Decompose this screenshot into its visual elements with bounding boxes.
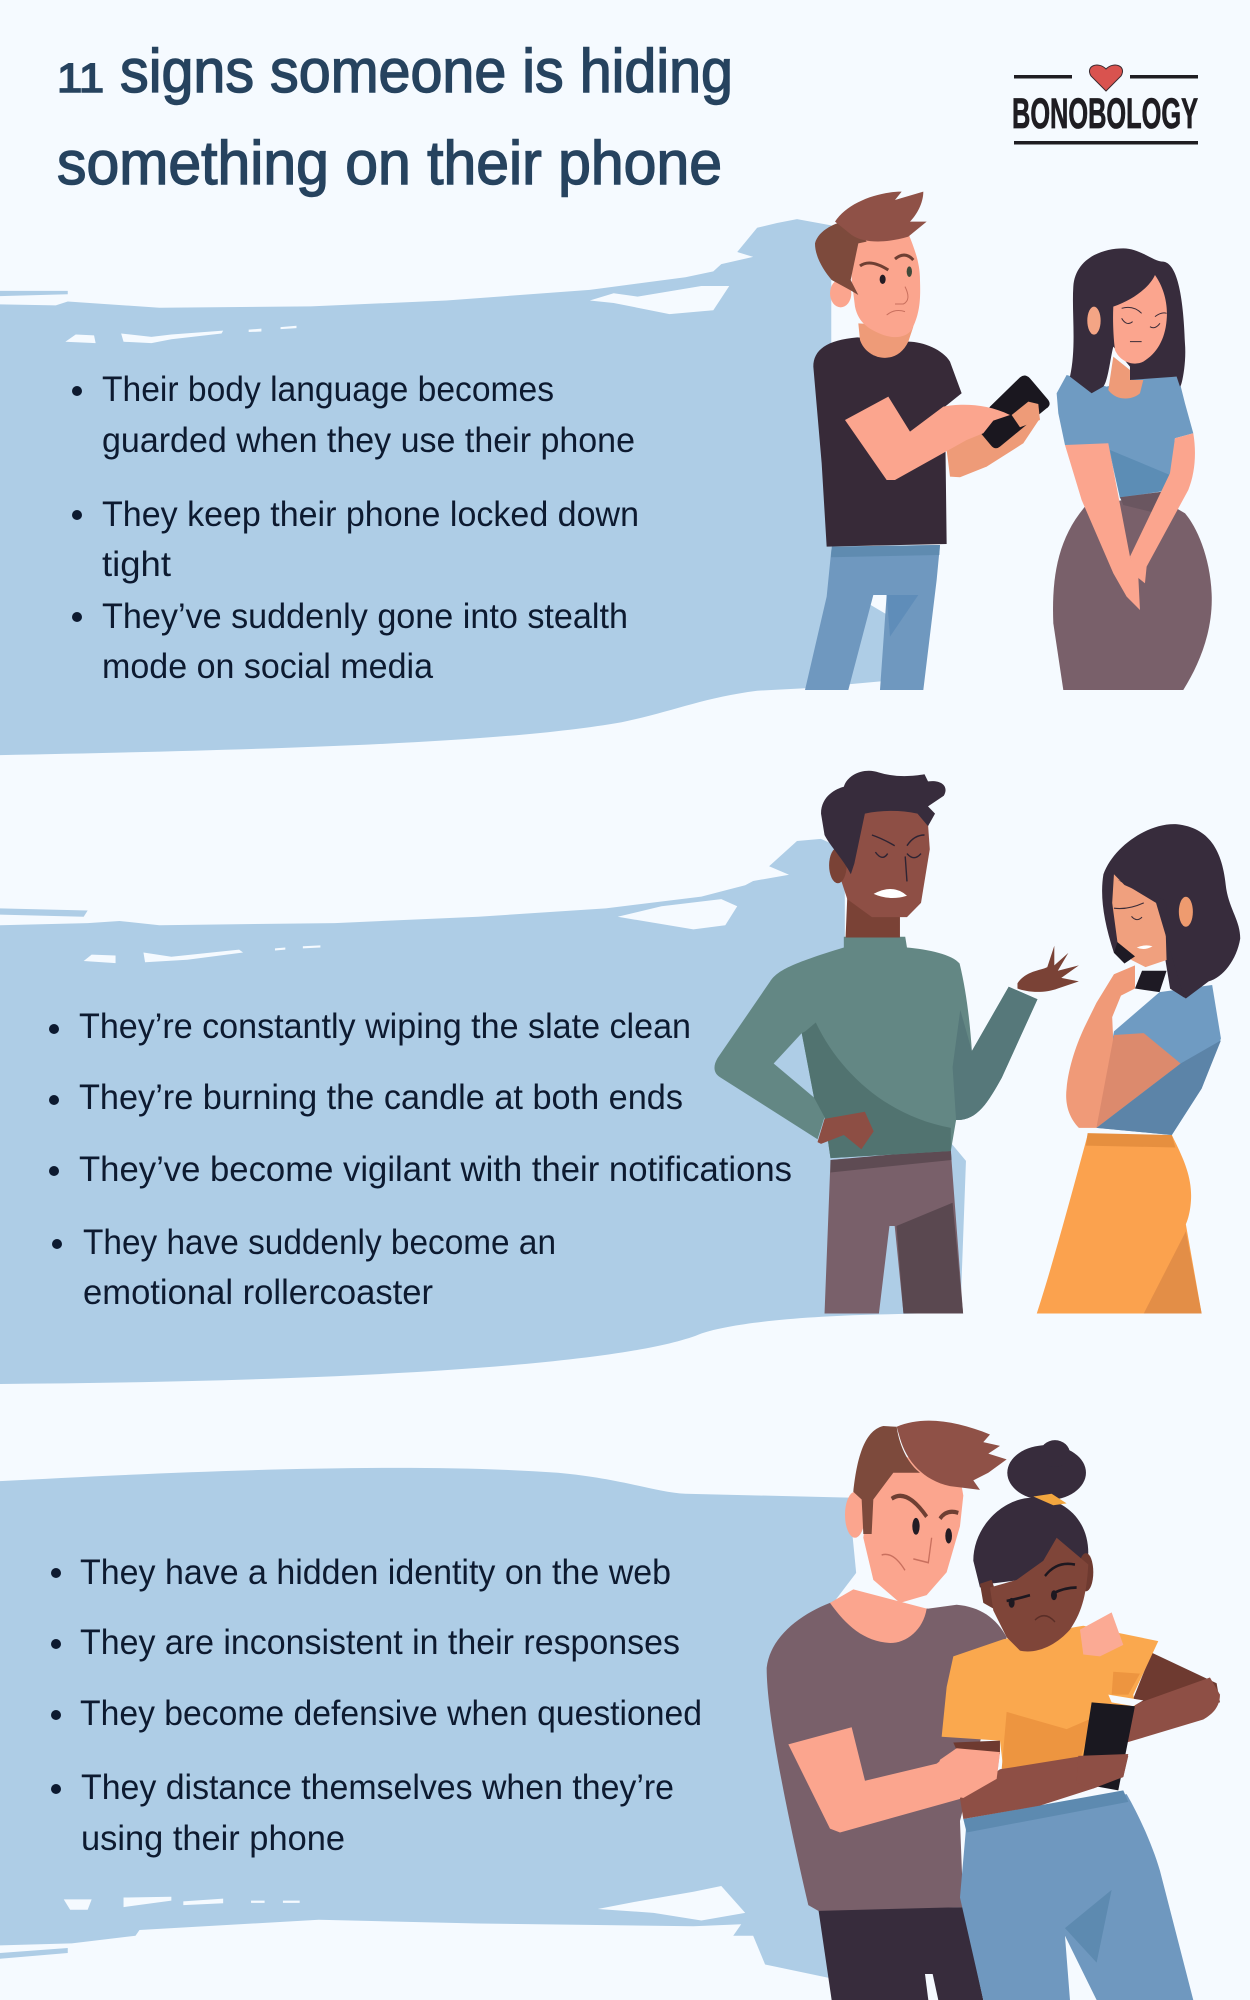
text list 3: They become defensive when questioned xyxy=(80,1694,702,1733)
text list 2: They have suddenly become an xyxy=(83,1223,556,1262)
text list 2 xyxy=(49,1007,792,1312)
text list 3 xyxy=(51,1553,702,1858)
text list 1: They keep their phone locked down xyxy=(102,495,639,534)
text list 3: They have a hidden identity on the web xyxy=(80,1553,671,1592)
brush panel 2 xyxy=(0,839,966,1384)
text list 1: mode on social media xyxy=(102,647,434,686)
text list 1: Their body language becomes xyxy=(102,370,554,409)
title: 11 xyxy=(57,55,104,101)
brush panel 1 xyxy=(0,219,889,755)
logo: Bonobology xyxy=(1012,65,1198,144)
title: something on their phone xyxy=(57,129,722,197)
text list 3: They distance themselves when they’re xyxy=(81,1768,674,1807)
illustration: upset woman xyxy=(1037,824,1240,1314)
illustration: arguing man xyxy=(714,771,1079,1314)
text list 2: They’re burning the candle at both ends xyxy=(79,1078,683,1117)
text list 2: They’re constantly wiping the slate clean xyxy=(79,1007,691,1046)
text list 1: guarded when they use their phone xyxy=(102,421,635,460)
illustration: man with phone xyxy=(805,192,1050,690)
text list 3: They are inconsistent in their responses xyxy=(80,1623,680,1662)
text list 2: They’ve become vigilant with their notifications xyxy=(79,1150,792,1189)
text list 2: emotional rollercoaster xyxy=(83,1273,433,1312)
text list 1 xyxy=(72,370,639,686)
text list 3: using their phone xyxy=(81,1819,345,1858)
title: signs someone is hiding xyxy=(120,37,733,105)
illustration: woman checking phone xyxy=(930,1440,1220,2000)
text list 1: tight xyxy=(102,545,171,584)
illustration: angry man with arm around woman xyxy=(767,1421,1007,2000)
brush panel 3 xyxy=(0,1468,877,1978)
illustration: sad woman xyxy=(1053,248,1212,690)
text list 1: They’ve suddenly gone into stealth xyxy=(102,597,628,636)
title xyxy=(57,37,733,197)
